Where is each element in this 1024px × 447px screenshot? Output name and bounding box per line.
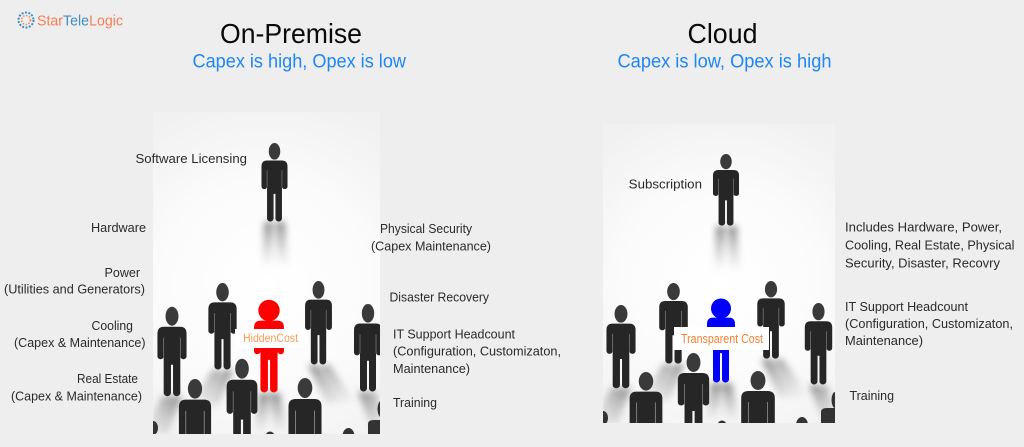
figure: top person bbox=[713, 154, 739, 226]
text block: cloud labels: Includes Hardware, Power, bbox=[845, 220, 1002, 235]
figure: front row right person bbox=[288, 378, 322, 435]
text block: on-premise right labels: (Capex Maintenance) bbox=[371, 238, 491, 254]
text block: on-premise left labels: Power bbox=[104, 265, 141, 280]
text block: cloud labels: Maintenance) bbox=[845, 333, 923, 348]
text block: on-premise right labels bbox=[371, 221, 561, 410]
figure: front row right person bbox=[741, 371, 775, 425]
figure: front row left person bbox=[179, 379, 211, 435]
figures: partial heads at the bottom edge bbox=[603, 392, 835, 423]
text block: on-premise left labels: Hardware bbox=[91, 220, 146, 235]
text block: cloud labels: Training bbox=[850, 388, 894, 403]
figure: front row centre person bbox=[678, 353, 709, 425]
text block: on-premise left labels bbox=[4, 151, 247, 404]
figure: far right person bbox=[805, 303, 832, 384]
figure: red person hidden cost bbox=[254, 300, 284, 392]
panel: cloud people illustration bbox=[603, 146, 835, 423]
logo: StarTeleLogic: StarTeleLogic bbox=[37, 12, 123, 30]
panel: on-premise people illustration bbox=[153, 139, 380, 434]
text block: on-premise left labels: Software Licensing bbox=[136, 151, 247, 166]
text block: on-premise left labels: (Capex & Maintenance) bbox=[14, 335, 146, 350]
figure: front row centre person bbox=[227, 359, 257, 434]
text block: on-premise right labels: IT Support Headcount bbox=[393, 326, 515, 342]
callout: HiddenCost: HiddenCost bbox=[243, 331, 299, 345]
figure: back row left person bbox=[157, 307, 187, 396]
text block: cloud labels: Cooling, Real Estate, Physical bbox=[845, 238, 1015, 253]
title: On-Premise: On-Premise bbox=[220, 18, 362, 49]
figure: blue person transparent cost bbox=[707, 298, 735, 383]
figure: far right person bbox=[354, 304, 382, 392]
callout: HiddenCost bbox=[235, 329, 304, 348]
text block: on-premise left labels: (Capex & Maintenance) bbox=[11, 388, 142, 404]
text block: on-premise right labels: Disaster Recovery bbox=[390, 290, 489, 304]
figure: front row left person bbox=[630, 372, 662, 425]
figure: top person bbox=[261, 143, 288, 222]
callout: Transparent Cost: Transparent Cost bbox=[681, 331, 763, 346]
text block: on-premise left labels: Real Estate bbox=[77, 371, 138, 386]
text block: cloud labels: (Configuration, Customizaton, bbox=[845, 316, 1013, 331]
figure: back row second person bbox=[659, 283, 688, 364]
text block: cloud labels bbox=[629, 177, 1015, 403]
figure: back row second person bbox=[208, 283, 237, 370]
text block: cloud labels: Subscription bbox=[629, 177, 702, 192]
subtitle: on-premise capex and opex: Capex is high, Opex is low bbox=[192, 52, 406, 72]
text block: on-premise left labels: (Utilities and Generators) bbox=[4, 282, 145, 296]
figure: back row right person bbox=[305, 281, 332, 365]
text block: on-premise right labels: Training bbox=[393, 395, 437, 410]
subtitle: cloud capex and opex: Capex is low, Opex is high bbox=[618, 52, 832, 72]
text block: on-premise right labels: (Configuration, Customizaton, bbox=[393, 344, 561, 358]
text block: on-premise left labels: Cooling bbox=[92, 318, 133, 333]
figures: partial heads at the bottom edge bbox=[153, 401, 380, 434]
figure: back row left person bbox=[606, 305, 636, 388]
figure: back row right person bbox=[757, 281, 785, 359]
title: Cloud: Cloud bbox=[688, 18, 758, 49]
text block: cloud labels: IT Support Headcount bbox=[845, 299, 968, 314]
text block: on-premise right labels: Physical Security bbox=[380, 221, 472, 236]
callout: Transparent Cost bbox=[674, 327, 769, 350]
text block: on-premise right labels: Maintenance) bbox=[393, 361, 470, 376]
text block: cloud labels: Security, Disaster, Recovry bbox=[845, 256, 1000, 271]
